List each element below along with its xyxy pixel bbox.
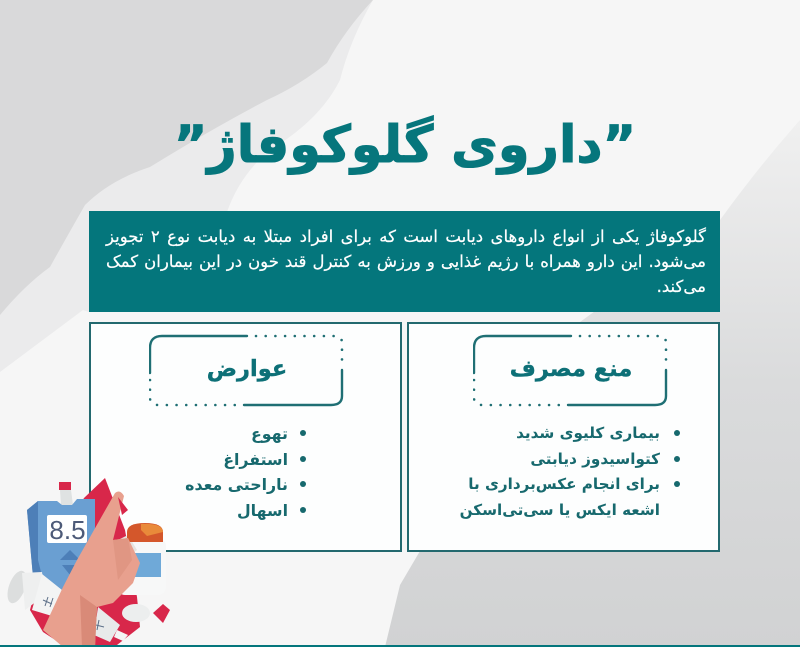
intro text block — [89, 211, 720, 312]
glucose meter — [27, 499, 95, 595]
side effects list: تهوع — [251, 424, 288, 443]
side effects heading: عوارض — [207, 356, 287, 382]
syringe — [4, 568, 62, 616]
side effects list: اسهال — [237, 500, 288, 520]
side effects heading frame — [149, 334, 344, 406]
intro text block: گلوکوفاژ یکی از انواع داروهای دیابت است که برای افراد مبتلا به دیابت نوع ۲ تجویز — [106, 227, 706, 246]
side effects list — [185, 424, 306, 520]
contraindications list: بیماری کلیوی شدید — [516, 424, 660, 442]
side effects list: ناراحتی معده — [185, 475, 288, 494]
pills — [122, 604, 170, 623]
glucose strip — [59, 482, 73, 505]
contraindications heading: منع مصرف — [510, 356, 632, 382]
contraindications list: کتواسیدوز دیابتی — [530, 450, 660, 468]
red blood drop — [30, 478, 140, 645]
hand with raised finger — [43, 492, 140, 647]
contraindications heading frame — [473, 334, 668, 406]
second syringe — [94, 607, 128, 642]
title: ”داروی گلوکوفاژ” — [174, 116, 636, 175]
bottom rule — [0, 645, 800, 647]
medicine bottle — [117, 523, 166, 595]
intro text block: می‌شود. این دارو همراه با رژیم غذایی و ورزش به کنترل قند خون در این بیماران کمک — [106, 252, 706, 271]
intro text block: می‌کند. — [657, 277, 706, 296]
illustration: diabetes hand and meter — [8, 478, 170, 645]
panel: contraindications — [407, 322, 720, 552]
contraindications list: برای انجام عکس‌برداری با اشعه ایکس یا سی‌تی‌اسکن — [460, 475, 660, 518]
glucose meter: 8.5 — [49, 515, 86, 545]
contraindications list — [460, 424, 680, 519]
side effects list: استفراغ — [223, 450, 288, 468]
panel: side effects — [89, 322, 402, 552]
fingernail — [118, 497, 128, 515]
